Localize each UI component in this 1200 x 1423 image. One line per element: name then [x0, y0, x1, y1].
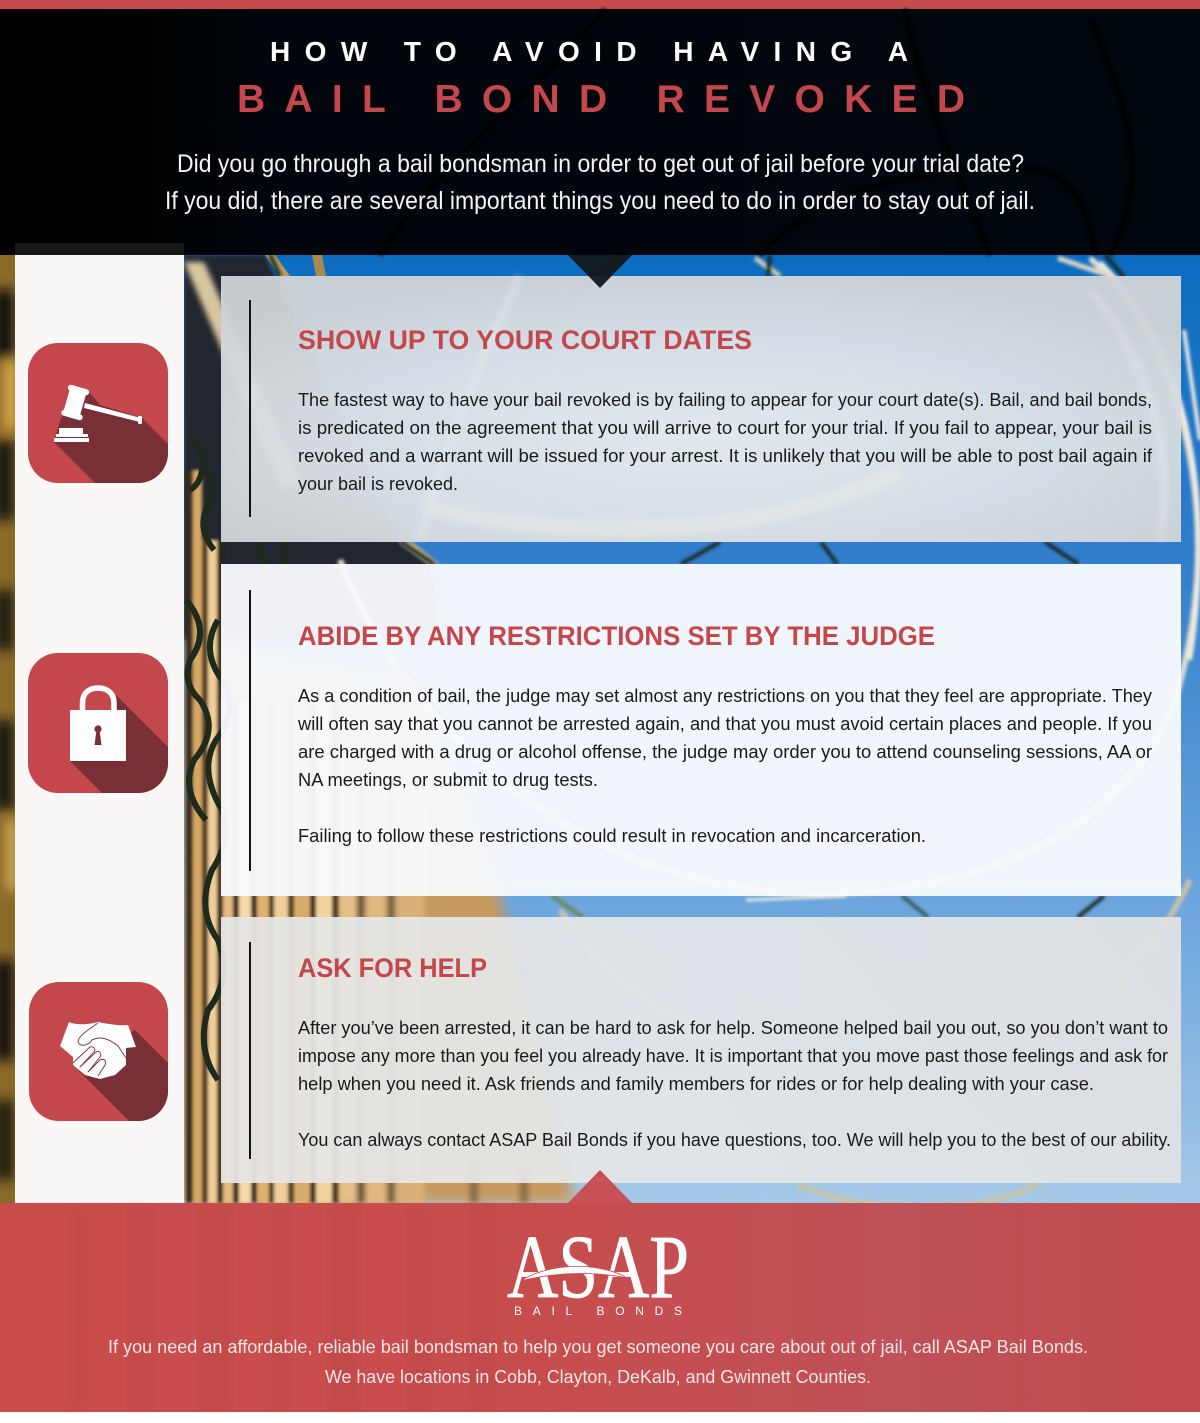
title line two: BAIL BOND REVOKED: [237, 78, 965, 121]
dark backdrop behind the fence: [184, 255, 440, 640]
icon: handshake: [29, 982, 170, 1122]
sidebar: [15, 255, 184, 1203]
body: ask for help: You can always contact ASAP Bail Bonds if you have questions, too. We will help you to the best of our ability.: [298, 1129, 1171, 1150]
razor wire, dark distant strands: [270, 255, 1125, 917]
body: restrictions: are charged with a drug or alcohol offense, the judge may order you to attend counseling sessions, AA or: [298, 741, 1152, 762]
background photo: fence and razor wire against the sky: [0, 255, 1200, 1203]
body: restrictions: NA meetings, or submit to drug tests.: [298, 769, 598, 790]
body: court dates: your bail is revoked.: [298, 473, 458, 494]
icon: gavel: [28, 343, 170, 484]
heading: restrictions: ABIDE BY ANY RESTRICTIONS SET BY THE JUDGE: [298, 621, 935, 651]
panel: show up to your court dates: [221, 276, 1181, 542]
footer panel: [0, 1170, 1200, 1412]
body: court dates: is predicated on the agreement that you will arrive to court for your trial. If you fail to appear, your bail is: [298, 417, 1152, 438]
body: ask for help: [298, 1017, 1171, 1150]
arrow: footer pointer: [568, 1170, 632, 1203]
body: court dates: [298, 389, 1153, 494]
logo: ASAP Bail Bonds: ASAP: [507, 1218, 689, 1317]
sidebar top tab: [15, 243, 184, 255]
header panel: [0, 9, 1200, 255]
blurred tan posts on the fence: [184, 640, 575, 1203]
body: restrictions: [297, 685, 1153, 846]
body: ask for help: impose any more than you feel you already have. It is important that you move past those feelings and ask for: [298, 1045, 1168, 1066]
heading: court dates: SHOW UP TO YOUR COURT DATES: [298, 325, 752, 355]
heading: ask for help: ASK FOR HELP: [298, 953, 487, 983]
intro text: Did you go through a bail bondsman in order to get out of jail before your trial date?: [177, 150, 1024, 178]
intro text: [165, 150, 1035, 215]
body: restrictions: will often say that you cannot be arrested again, and that you must avoid certain places and people. If you: [297, 713, 1152, 734]
razor wire, pale foreground loops: [340, 258, 1200, 1207]
arrow: header pointer: [568, 255, 632, 288]
body: court dates: revoked and a warrant will be issued for your arrest. It is unlikely that you will be able to post bail again if: [298, 445, 1153, 466]
intro text: If you did, there are several important things you need to do in order to stay out of jail.: [165, 187, 1035, 215]
footer text: [108, 1336, 1088, 1387]
footer text: We have locations in Cobb, Clayton, DeKalb, and Gwinnett Counties.: [325, 1366, 871, 1387]
panel: ask for help: [221, 917, 1181, 1183]
body: court dates: The fastest way to have your bail revoked is by failing to appear for your court date(s). Bail, and bail bonds,: [298, 389, 1152, 410]
icon: padlock: [28, 653, 170, 794]
footer text: If you need an affordable, reliable bail bondsman to help you get someone you care about out of jail, call ASAP Bail Bonds.: [108, 1336, 1088, 1357]
chain link strands: [186, 440, 287, 1080]
panel: abide by restrictions: [221, 564, 1181, 896]
top red bar: [0, 0, 1200, 9]
logo: ASAP Bail Bonds: BAIL BONDS: [514, 1304, 682, 1318]
title line one: HOW TO AVOID HAVING A: [270, 36, 908, 67]
body: ask for help: help when you need it. Ask friends and family members for rides or for help dealing with your case.: [298, 1073, 1094, 1094]
body: ask for help: After you’ve been arrested, it can be hard to ask for help. Someone helped bail you out, so you don’t want to: [298, 1017, 1168, 1038]
body: restrictions: Failing to follow these restrictions could result in revocation and incarceration.: [298, 825, 926, 846]
body: restrictions: As a condition of bail, the judge may set almost any restrictions on you that they feel are appropriate. They: [298, 685, 1153, 706]
